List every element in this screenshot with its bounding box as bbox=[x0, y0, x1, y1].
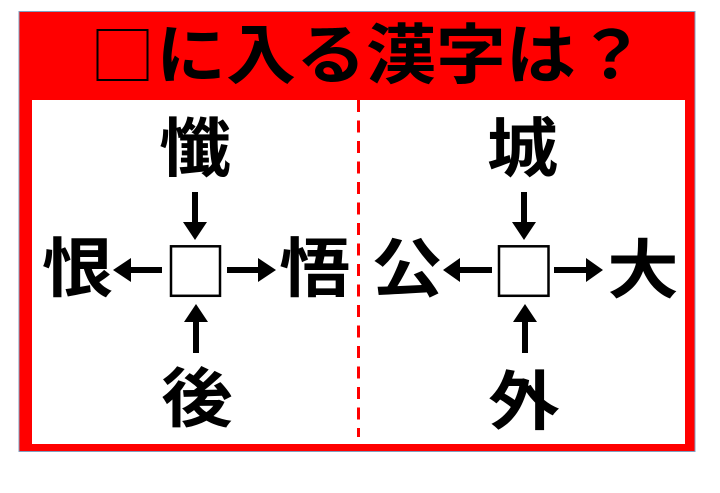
kanji top: 城 bbox=[487, 114, 558, 186]
arrow to right bbox=[227, 258, 276, 282]
kanji right: 大 bbox=[607, 235, 679, 307]
arrow down to square bbox=[512, 192, 536, 240]
arrow up to square bbox=[184, 304, 208, 353]
dashed divider bbox=[357, 100, 360, 437]
arrow up to square bbox=[513, 304, 537, 353]
center blank square bbox=[499, 246, 548, 296]
arrow to left bbox=[113, 258, 162, 282]
arrow to right bbox=[554, 258, 603, 282]
arrow to left bbox=[443, 258, 492, 282]
kanji left: 恨 bbox=[42, 234, 113, 306]
title bbox=[98, 20, 646, 92]
right puzzle bbox=[371, 114, 679, 439]
kanji left: 公 bbox=[371, 234, 443, 306]
kanji right: 悟 bbox=[279, 234, 351, 306]
title blank square bbox=[98, 30, 148, 80]
kanji bottom: 外 bbox=[488, 367, 560, 439]
title text: に入る漢字は？ bbox=[156, 20, 646, 92]
left puzzle bbox=[42, 114, 351, 436]
kanji top: 懺 bbox=[159, 114, 231, 186]
kanji bottom: 後 bbox=[161, 364, 233, 436]
center blank square bbox=[171, 246, 220, 296]
white puzzle panel bbox=[32, 100, 685, 444]
arrow down to square bbox=[183, 192, 207, 240]
